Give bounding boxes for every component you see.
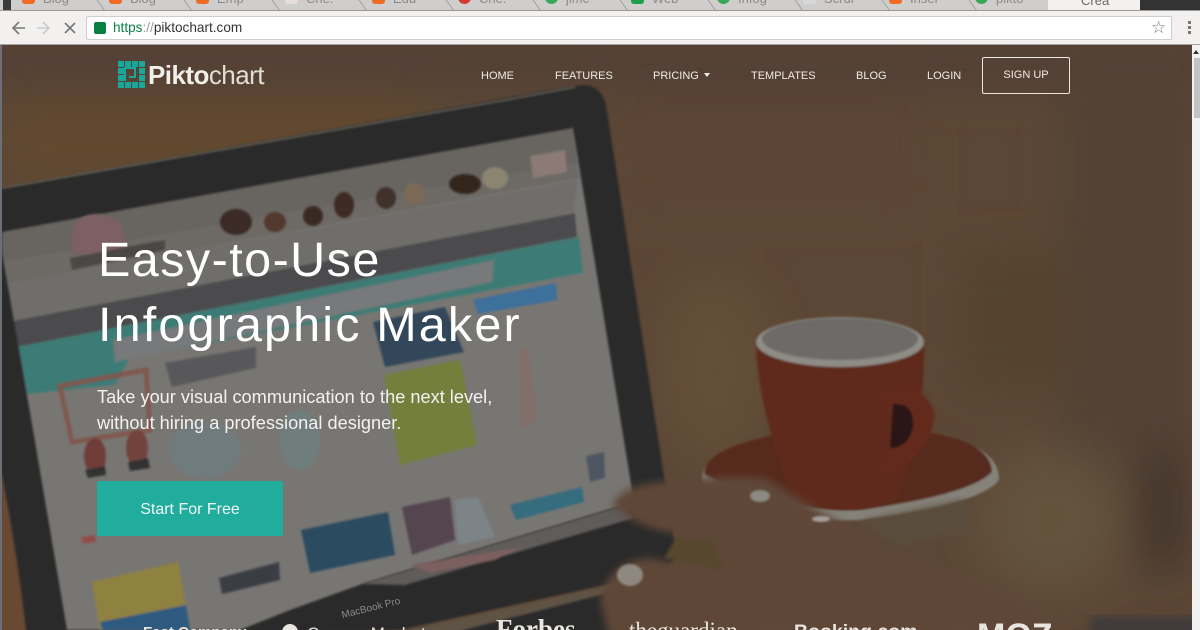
lid rim highlight	[2, 87, 575, 188]
nav: pricing: PRICING	[653, 70, 699, 82]
call to action button	[97, 481, 283, 536]
call to action button: Start For Free	[140, 501, 240, 518]
press: market icon	[282, 624, 298, 630]
menu dots	[1188, 21, 1191, 24]
keyboard deck	[400, 585, 650, 630]
fingernails	[812, 516, 830, 522]
heading: Easy-to-Use	[98, 233, 381, 287]
blue template	[473, 283, 557, 314]
address row	[2, 180, 578, 323]
navigation	[481, 57, 1070, 94]
coffee cup	[756, 317, 935, 510]
scrollbar	[1192, 45, 1200, 630]
subheading: without hiring a professional designer.	[97, 413, 401, 433]
scroll thumb	[1194, 58, 1200, 118]
nav: blog: BLOG	[856, 70, 887, 82]
lock icon	[94, 22, 106, 34]
nav: sign up button	[982, 57, 1070, 94]
red bar	[81, 535, 96, 544]
star icon: ☆	[1151, 18, 1166, 37]
heading	[98, 233, 522, 352]
scroll to top	[586, 452, 605, 482]
pink strip	[410, 547, 522, 573]
search bar	[113, 260, 494, 362]
music card	[301, 512, 395, 573]
page area	[0, 120, 640, 630]
tabs	[22, 0, 69, 6]
laptop brand label: MacBook Pro	[341, 596, 401, 621]
url: https://piktochart.com	[113, 20, 242, 35]
left window edge	[0, 45, 2, 630]
navy template	[373, 307, 464, 367]
logo mark	[118, 61, 145, 88]
shadow under saucer	[860, 500, 970, 545]
anatomy figure	[518, 345, 538, 430]
nav: login: LOGIN	[927, 70, 961, 82]
nav: features: FEATURES	[555, 70, 613, 82]
ring	[750, 490, 770, 502]
new years ribbon	[219, 562, 280, 594]
hand	[600, 477, 1068, 630]
grey screen bottom band	[362, 505, 634, 585]
grey template	[165, 347, 256, 387]
first tab wedge	[3, 0, 11, 11]
bottom right shadow	[1090, 616, 1200, 630]
teal band	[2, 237, 583, 397]
browser chrome	[2, 128, 577, 262]
navigation arrows	[12, 22, 76, 34]
wood gap between fingers	[664, 538, 724, 570]
travel card	[402, 497, 455, 555]
banner	[510, 487, 584, 520]
tab separators	[96, 0, 977, 10]
browser thumbnails	[220, 209, 252, 235]
nav: home: HOME	[481, 70, 514, 82]
subheading: Take your visual communication to the next level,	[97, 387, 492, 407]
laptop lid	[0, 85, 676, 630]
window corner	[1140, 0, 1200, 11]
house template	[280, 410, 320, 470]
flowchart dots	[169, 422, 241, 478]
red people icons	[84, 438, 106, 474]
logo	[118, 60, 264, 90]
address bar	[86, 16, 1172, 40]
nav: sign up button: SIGN UP	[1003, 69, 1049, 81]
active tab	[1048, 0, 1140, 11]
dark nav band	[2, 213, 577, 350]
red frame template	[60, 370, 150, 442]
subheading	[97, 387, 492, 433]
logo text: Piktochart	[148, 60, 264, 90]
scroll arrow	[1193, 50, 1199, 54]
green template	[384, 360, 477, 465]
browser toolbar	[0, 11, 1200, 45]
nav: templates: TEMPLATES	[751, 70, 816, 82]
yellow card	[92, 562, 190, 630]
browser tab strip	[0, 0, 1200, 11]
heading: Infographic Maker	[98, 298, 522, 352]
laptop screen	[0, 120, 640, 630]
pink template	[72, 214, 127, 255]
saucer	[702, 432, 999, 520]
